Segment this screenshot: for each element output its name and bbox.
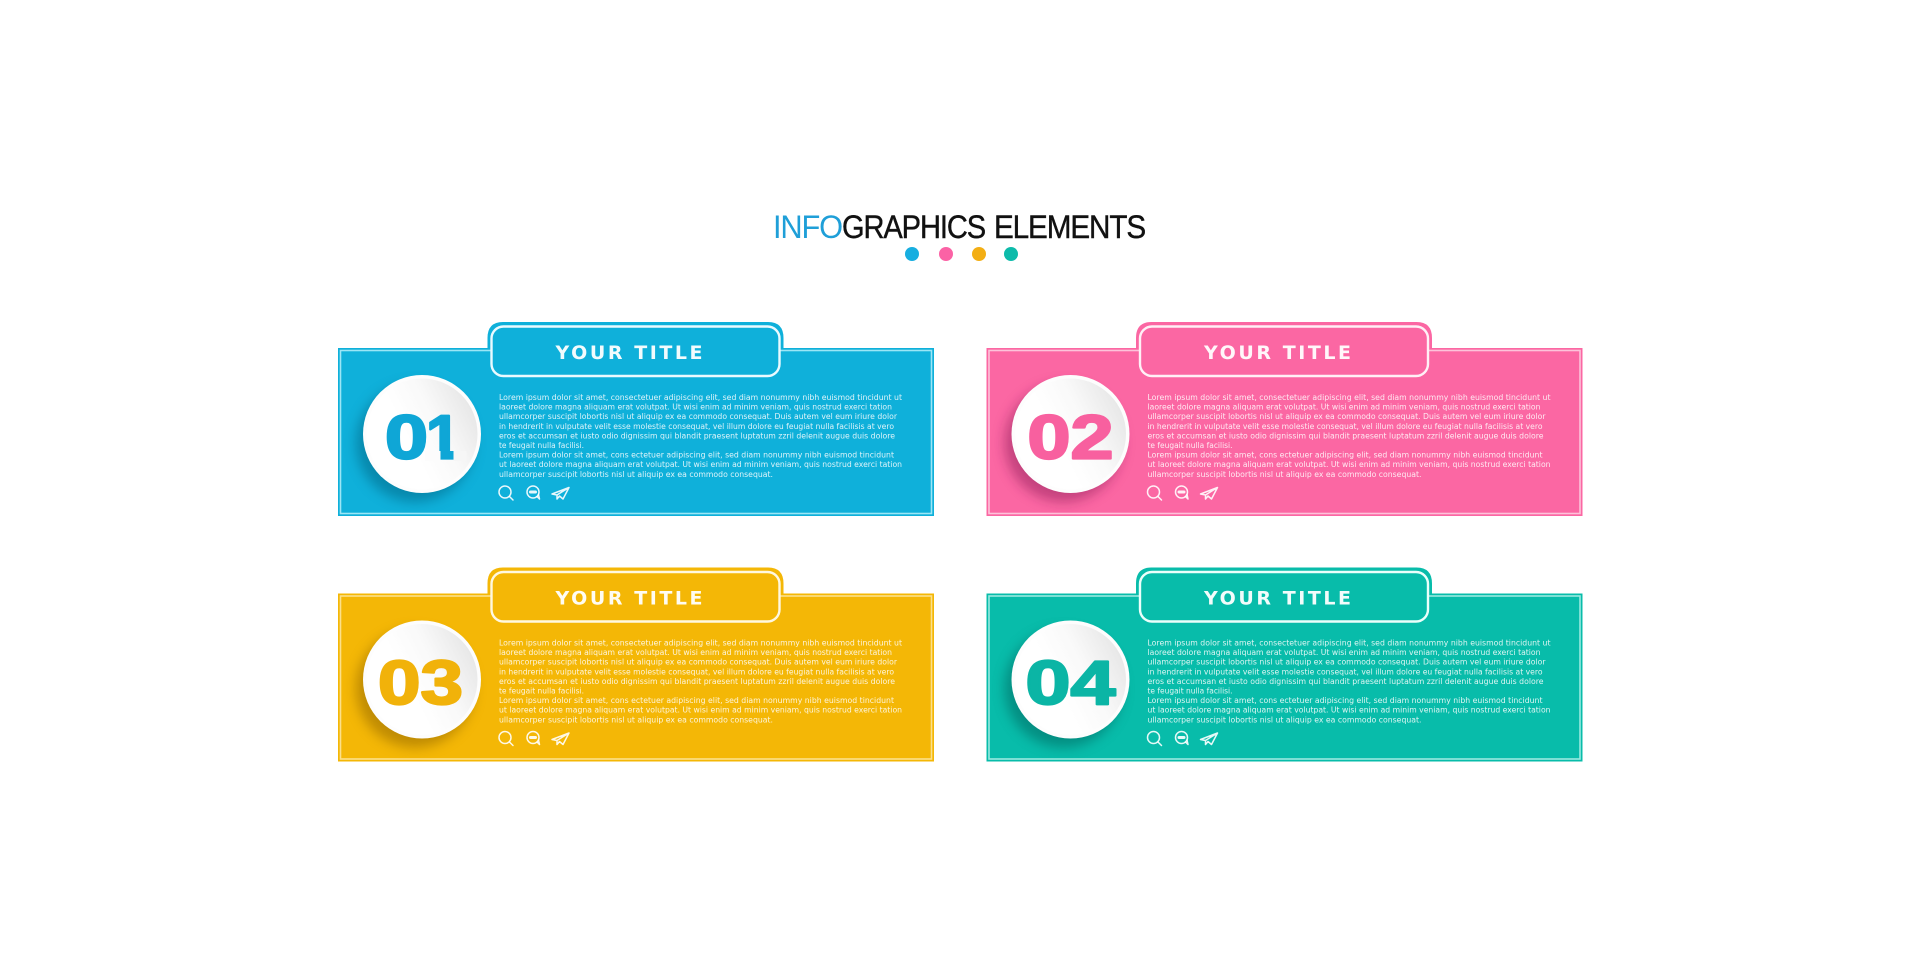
body text: Lorem ipsum dolor sit amet, consectetuer adipiscing elit, sed diam nonummy nibh euismod tincidunt ut — [1148, 393, 1551, 402]
body text: Lorem ipsum dolor sit amet, consectetuer adipiscing elit, sed diam nonummy nibh euismod tincidunt ut — [1148, 638, 1551, 648]
number disc: 04 — [1026, 649, 1116, 718]
icons — [1148, 486, 1218, 500]
body text — [499, 393, 902, 479]
number disc — [356, 620, 481, 748]
panel: card 02 — [986, 322, 1582, 516]
body text: Lorem ipsum dolor sit amet, cons ectetuer adipiscing elit, sed diam nonummy nibh euismod tincidunt — [1148, 451, 1543, 460]
body text — [1148, 393, 1551, 479]
body text: eros et accumsan et iusto odio dignissim qui blandit praesent luptatum zzril delenit augue duis dolore — [1148, 677, 1544, 686]
body text: te feugait nulla facilisi. — [499, 441, 584, 450]
body text: ullamcorper suscipit lobortis nisl ut aliquip ex ea commodo consequat. Duis autem vel eum iriure dolor — [499, 412, 898, 421]
body text: laoreet dolore magna aliquam erat volutpat. Ut wisi enim ad minim veniam, quis nostrud exerci tation — [499, 648, 892, 657]
body text: ut laoreet dolore magna aliquam erat volutpat. Ut wisi enim ad minim veniam, quis nostrud exerci tation — [1148, 706, 1551, 715]
body text: Lorem ipsum dolor sit amet, cons ectetuer adipiscing elit, sed diam nonummy nibh euismod tincidunt — [499, 696, 894, 705]
body text: ullamcorper suscipit lobortis nisl ut aliquip ex ea commodo consequat. Duis autem vel eum iriure dolor — [1148, 658, 1546, 667]
body text: eros et accumsan et iusto odio dignissim qui blandit praesent luptatum zzril delenit augue duis dolore — [499, 677, 895, 686]
body text: laoreet dolore magna aliquam erat volutpat. Ut wisi enim ad minim veniam, quis nostrud exerci tation — [1148, 648, 1541, 657]
body text: ullamcorper suscipit lobortis nisl ut aliquip ex ea commodo consequat. — [1148, 715, 1422, 724]
title tab: YOUR TITLE — [1203, 342, 1351, 364]
number disc: 03 — [378, 649, 463, 718]
body text: Lorem ipsum dolor sit amet, consectetuer adipiscing elit, sed diam nonummy nibh euismod tincidunt ut — [499, 638, 902, 648]
body text: in hendrerit in vulputate velit esse molestie consequat, vel illum dolore eu feugiat nulla facilisis at vero — [499, 422, 894, 431]
body text: in hendrerit in vulputate velit esse molestie consequat, vel illum dolore eu feugiat nulla facilisis at vero — [1148, 667, 1543, 676]
title: INFO — [773, 209, 842, 245]
body text: te feugait nulla facilisi. — [499, 686, 584, 696]
panel: card 01 — [338, 322, 934, 516]
body text — [499, 638, 902, 724]
title: GRAPHICS — [842, 209, 985, 245]
body text: Lorem ipsum dolor sit amet, cons ectetuer adipiscing elit, sed diam nonummy nibh euismod tincidunt — [1148, 696, 1543, 705]
body text — [1148, 638, 1551, 724]
body text: laoreet dolore magna aliquam erat volutpat. Ut wisi enim ad minim veniam, quis nostrud exerci tation — [1148, 403, 1541, 412]
title tab: YOUR TITLE — [1203, 588, 1351, 610]
body text: in hendrerit in vulputate velit esse molestie consequat, vel illum dolore eu feugiat nulla facilisis at vero — [1148, 422, 1543, 431]
number disc — [356, 375, 481, 502]
body text: ut laoreet dolore magna aliquam erat volutpat. Ut wisi enim ad minim veniam, quis nostrud exerci tation — [499, 706, 902, 715]
title tab — [492, 572, 780, 622]
body text: in hendrerit in vulputate velit esse molestie consequat, vel illum dolore eu feugiat nulla facilisis at vero — [499, 667, 894, 676]
number disc — [1004, 620, 1130, 748]
body text: ullamcorper suscipit lobortis nisl ut aliquip ex ea commodo consequat. Duis autem vel eum iriure dolor — [499, 658, 898, 667]
body text: ullamcorper suscipit lobortis nisl ut aliquip ex ea commodo consequat. Duis autem vel eum iriure dolor — [1148, 412, 1546, 421]
body text: eros et accumsan et iusto odio dignissim qui blandit praesent luptatum zzril delenit augue duis dolore — [499, 431, 895, 440]
number disc — [1004, 375, 1130, 502]
body text: te feugait nulla facilisi. — [1148, 441, 1232, 450]
number disc: 1 — [426, 404, 460, 472]
icons — [499, 732, 569, 746]
panel: card 03 — [338, 568, 934, 762]
body text: eros et accumsan et iusto odio dignissim qui blandit praesent luptatum zzril delenit augue duis dolore — [1148, 431, 1544, 440]
title: ELEMENTS — [994, 209, 1145, 245]
body text: Lorem ipsum dolor sit amet, consectetuer adipiscing elit, sed diam nonummy nibh euismod tincidunt ut — [499, 393, 902, 402]
body text: laoreet dolore magna aliquam erat volutpat. Ut wisi enim ad minim veniam, quis nostrud exerci tation — [499, 403, 892, 412]
title tab — [1140, 326, 1428, 376]
title tab — [492, 326, 780, 376]
number disc: 02 — [1028, 404, 1114, 472]
panel: card 04 — [986, 568, 1582, 762]
body text: ut laoreet dolore magna aliquam erat volutpat. Ut wisi enim ad minim veniam, quis nostrud exerci tation — [1148, 460, 1551, 469]
title tab: YOUR TITLE — [554, 588, 702, 610]
title — [773, 209, 1145, 245]
icons — [499, 486, 569, 500]
body text: ullamcorper suscipit lobortis nisl ut aliquip ex ea commodo consequat. — [1148, 470, 1422, 479]
body text: ullamcorper suscipit lobortis nisl ut aliquip ex ea commodo consequat. — [499, 470, 773, 479]
title dots — [905, 247, 1018, 261]
icons — [1148, 732, 1218, 746]
title tab — [1140, 572, 1428, 622]
body text: Lorem ipsum dolor sit amet, cons ectetuer adipiscing elit, sed diam nonummy nibh euismod tincidunt — [499, 451, 894, 460]
body text: ullamcorper suscipit lobortis nisl ut aliquip ex ea commodo consequat. — [499, 715, 773, 724]
number disc: 0 — [385, 404, 428, 472]
body text: te feugait nulla facilisi. — [1148, 686, 1232, 696]
title tab: YOUR TITLE — [554, 342, 702, 364]
body text: ut laoreet dolore magna aliquam erat volutpat. Ut wisi enim ad minim veniam, quis nostrud exerci tation — [499, 460, 902, 469]
